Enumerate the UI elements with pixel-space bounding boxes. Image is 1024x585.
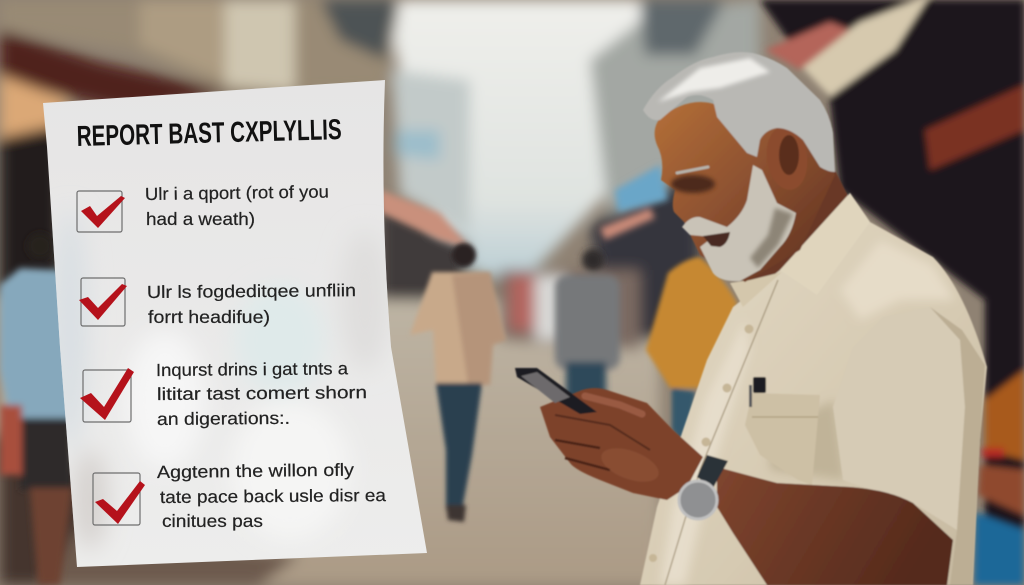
checklist item 3: an digerations:. — [157, 408, 290, 429]
paper checklist — [43, 80, 427, 567]
phone — [515, 368, 597, 414]
neck — [745, 170, 850, 285]
man using phone — [515, 52, 987, 585]
shirt shading — [660, 240, 955, 585]
paper sheet — [43, 80, 427, 567]
placket line — [665, 280, 778, 585]
checklist title: REPORT BAST CXPLYLLIS — [76, 114, 342, 153]
hair — [643, 52, 835, 172]
beard shadow — [750, 208, 793, 268]
checklist item 1: had a weath) — [146, 209, 255, 229]
checklist item 4 — [93, 460, 386, 531]
sleeve — [833, 307, 965, 530]
shirt buttons — [649, 324, 754, 562]
right dark shopfront — [760, 0, 1024, 585]
checklist item 1: Ulr i a qport (rot of you — [145, 181, 329, 204]
hand and fingers — [540, 388, 703, 500]
sleeve shadow — [930, 307, 985, 585]
ghosted figures showing through paper — [52, 210, 390, 550]
wristwatch — [679, 455, 728, 519]
face — [655, 102, 835, 282]
checklist item 3: lititar tast comert shorn — [157, 382, 367, 404]
checklist item 3 — [80, 358, 367, 429]
left collar — [730, 272, 782, 307]
hair highlight — [658, 58, 770, 102]
eye socket shadow — [671, 175, 715, 193]
checklist item 4: cinitues pas — [162, 511, 263, 531]
walker: left blue shirt — [0, 233, 82, 585]
checklist item 2: forrt headifue) — [148, 307, 270, 327]
shirt body — [640, 193, 987, 585]
walker: centre — [410, 243, 506, 522]
collar — [780, 193, 870, 295]
mouth — [703, 232, 730, 247]
checklist item 2 — [79, 278, 356, 327]
forearm — [717, 467, 953, 585]
checklist item 2: Ulr ls fogdeditqee unfliin — [147, 280, 356, 302]
walker: orange shirt — [646, 257, 737, 450]
pocket — [745, 377, 820, 485]
checklist item 1 — [77, 181, 329, 232]
ear — [763, 124, 811, 192]
eyebrow — [677, 167, 708, 173]
checklist item 3: Inqurst drins i gat tnts a — [156, 358, 348, 380]
beard — [682, 165, 796, 281]
checklist item 4: tate pace back usle disr ea — [160, 485, 386, 507]
checklist item 4: Aggtenn the willon ofly — [157, 460, 354, 482]
